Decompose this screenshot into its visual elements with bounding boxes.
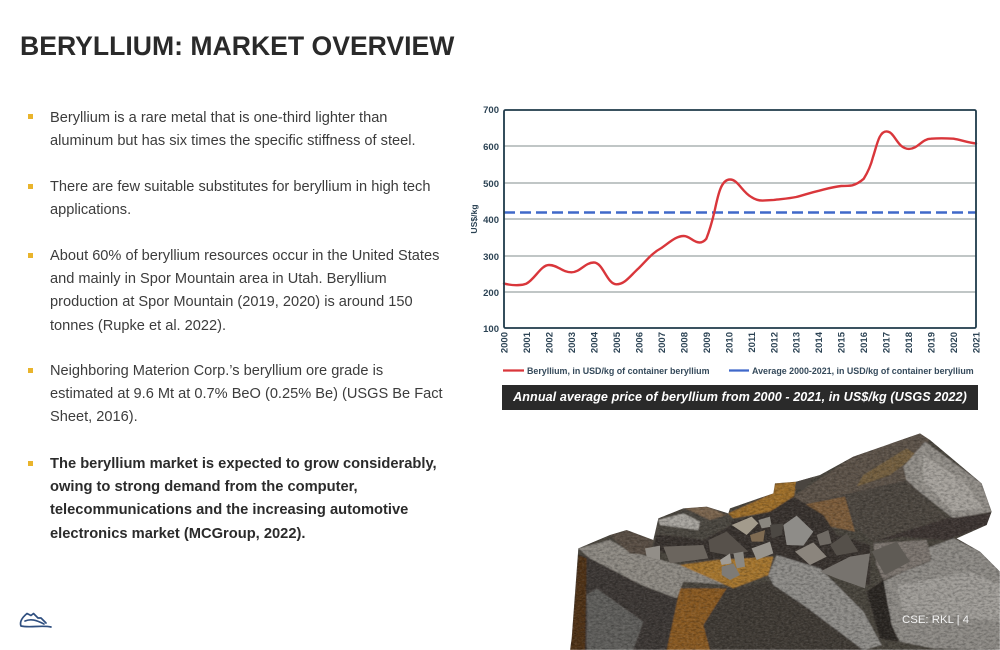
average dashed line <box>504 211 976 214</box>
bullet text: market growth: The beryllium market is expected to grow considerably, <box>50 456 437 472</box>
bullet text: substitutes: applications. <box>50 202 131 218</box>
bullet marker 3 <box>28 253 33 258</box>
x axis year labels: 2012 <box>769 332 780 353</box>
bullet text: rare metal: Beryllium is a rare metal that is one-third lighter than <box>50 110 387 126</box>
icon: mountain logo <box>20 612 52 628</box>
x axis year labels: 2009 <box>702 332 713 353</box>
x axis year labels: 2011 <box>747 331 758 353</box>
y axis title: US$/kg <box>469 204 479 234</box>
x axis year labels: 2019 <box>927 332 938 353</box>
x axis year labels: 2021 <box>972 331 982 353</box>
x axis year labels: 2013 <box>792 332 803 353</box>
bullet text: market growth: owing to strong demand from the computer, <box>50 479 358 495</box>
bullet text: ore grade: Neighboring Materion Corp.’s beryllium ore grade is <box>50 363 383 379</box>
legend: Beryllium, in USD/kg of container beryllium <box>527 366 710 376</box>
y axis labels: 100 <box>483 324 499 335</box>
x axis year labels: 2008 <box>679 332 690 353</box>
footer page marker: CSE: RKL | 4 <box>902 614 969 626</box>
bullet text: substitutes <box>50 179 430 218</box>
legend <box>503 366 974 376</box>
bullet text: ore grade: Sheet, 2016). <box>50 409 138 425</box>
y axis labels: 300 <box>483 252 499 263</box>
x axis year labels: 2016 <box>859 332 870 353</box>
x axis year labels <box>500 331 982 353</box>
legend: Average 2000-2021, in USD/kg of container beryllium <box>752 366 974 376</box>
y axis labels <box>483 105 499 335</box>
bullet text: rare metal <box>50 110 416 149</box>
bullet text: resources: tonnes (Rupke et al. 2022). <box>50 318 226 334</box>
y axis labels: 400 <box>483 215 499 226</box>
x axis year labels: 2018 <box>904 332 915 353</box>
bullet marker 2 <box>28 184 33 189</box>
title: BERYLLIUM: MARKET OVERVIEW <box>20 31 454 61</box>
bullet text: resources <box>50 248 439 334</box>
bullet text: ore grade: estimated at 9.6 Mt at 0.7% BeO (0.25% Be) (USGS Be Fact <box>50 386 443 402</box>
beryllium price line <box>504 131 976 285</box>
y axis labels: 700 <box>483 105 499 116</box>
x axis year labels: 2006 <box>634 332 645 353</box>
rock photo <box>570 434 1000 650</box>
chart caption <box>502 385 978 410</box>
bullet text: ore grade <box>50 363 443 425</box>
x axis year labels: 2003 <box>567 332 578 353</box>
bullet marker 4 <box>28 368 33 373</box>
chart caption: Annual average price of beryllium from 2000 - 2021, in US$/kg (USGS 2022) <box>513 390 967 404</box>
x axis year labels: 2000 <box>500 332 510 353</box>
bullet marker 5 <box>28 461 33 466</box>
bullet text: substitutes: There are few suitable substitutes for beryllium in high tech <box>50 179 430 195</box>
line chart: annual beryllium price <box>469 105 982 376</box>
bullet text: market growth: electronics market (MCGroup, 2022). <box>50 526 305 542</box>
x axis year labels: 2020 <box>949 332 960 353</box>
bullet text: resources: and mainly in Spor Mountain area in Utah. Beryllium <box>50 271 387 287</box>
x axis year labels: 2004 <box>589 331 600 353</box>
x axis year labels: 2005 <box>612 331 623 353</box>
y axis labels: 500 <box>483 179 499 190</box>
y axis labels: 600 <box>483 142 499 153</box>
x axis year labels: 2002 <box>544 332 556 353</box>
bullet text: market growth <box>50 456 437 542</box>
x axis year labels: 2001 <box>522 331 533 353</box>
x axis year labels: 2014 <box>814 331 825 353</box>
x axis year labels: 2010 <box>724 332 735 353</box>
bullet marker 1 <box>28 114 33 119</box>
x axis year labels: 2015 <box>837 331 848 353</box>
x axis year labels: 2017 <box>882 332 893 353</box>
bullet text: market growth: telecommunications and the increasing automotive <box>50 502 408 518</box>
x axis year labels: 2007 <box>657 332 668 353</box>
plot frame <box>504 110 976 328</box>
bullet text: resources: production at Spor Mountain (2019, 2020) is around 150 <box>50 294 413 310</box>
y axis labels: 200 <box>483 288 499 299</box>
bullet text: resources: About 60% of beryllium resources occur in the United States <box>50 248 439 264</box>
bullet text: rare metal: aluminum but has six times the specific stiffness of steel. <box>50 133 416 149</box>
